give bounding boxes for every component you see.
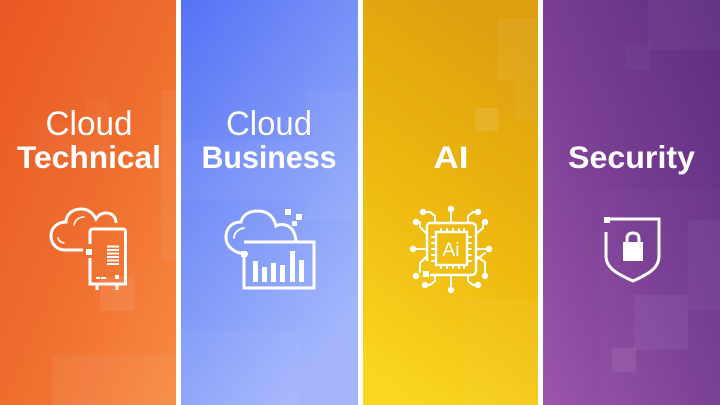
heading: Cloud Business: Cloud — [226, 105, 312, 143]
heading: AI: AI — [434, 139, 468, 175]
panel: Cloud Technical — [0, 0, 176, 405]
heading: Security: Security — [568, 139, 695, 175]
panel: Security — [543, 0, 720, 405]
icon: cloud and dashboard — [226, 209, 314, 288]
heading: Cloud Technical — [17, 105, 161, 175]
heading: Cloud Business: Business — [202, 139, 336, 175]
icon: cloud and server — [51, 209, 126, 290]
panel: AI — [363, 0, 538, 405]
panel: Cloud Business — [181, 0, 358, 405]
icon: AI chip: Ai — [443, 240, 459, 261]
heading: Cloud Technical: Technical — [17, 139, 161, 175]
heading: Cloud Technical: Cloud — [46, 105, 132, 143]
heading: Cloud Business — [202, 105, 336, 175]
icon: AI chip — [410, 206, 492, 293]
icon: shield with padlock — [604, 217, 659, 281]
